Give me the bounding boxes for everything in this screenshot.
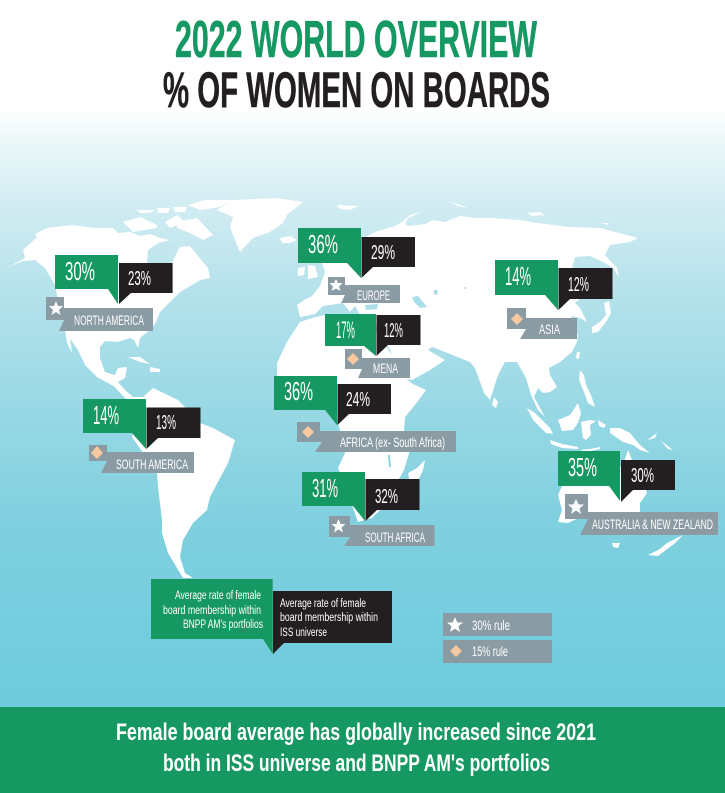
callout: North America: 23% xyxy=(128,268,151,290)
callout: MENA: MENA xyxy=(373,361,398,376)
callout: North America xyxy=(46,255,173,331)
callout: South Africa: 31% xyxy=(312,473,338,503)
callout: Australia and New Zealand: 30% xyxy=(631,465,654,487)
callout: Africa ex South Africa xyxy=(274,376,456,452)
callout: North America: 30% xyxy=(65,256,95,286)
callout: South America: 14% xyxy=(93,400,119,430)
callout: MENA: 17% xyxy=(336,317,355,344)
callout: Australia and New Zealand: 35% xyxy=(568,452,597,482)
key bubble: ISS universe: board membership within xyxy=(280,612,378,624)
key bubble: BNPP AM portfolios: board membership within xyxy=(163,605,261,617)
callout: Europe xyxy=(298,228,415,303)
callout: South Africa: SOUTH AFRICA xyxy=(365,530,425,545)
legend: 15% rule: 15% rule xyxy=(472,644,508,659)
callout: Asia: ASIA xyxy=(539,322,560,337)
callout: North America: NORTH AMERICA xyxy=(74,313,144,328)
key bubble: ISS universe: ISS universe xyxy=(280,627,327,639)
callout: Africa ex South Africa: 36% xyxy=(284,376,313,406)
world map xyxy=(0,198,683,578)
callout: South Africa: 32% xyxy=(375,486,398,508)
callout: Europe: 29% xyxy=(371,242,395,264)
legend: 15% rule xyxy=(443,640,552,663)
callout: Australia and New Zealand xyxy=(558,451,718,535)
key bubble: BNPP AM portfolios: Average rate of female xyxy=(175,590,261,602)
legend: 30% rule xyxy=(443,613,552,636)
callout: Asia xyxy=(495,260,612,339)
callout: Africa ex South Africa: 24% xyxy=(346,389,370,411)
callout: MENA xyxy=(325,314,420,378)
key bubble: BNPP AM portfolios xyxy=(151,579,273,654)
callout: South Africa xyxy=(302,472,434,546)
callout: South America: SOUTH AMERICA xyxy=(116,457,188,472)
key bubble: ISS universe xyxy=(273,591,392,654)
callout: Asia: 12% xyxy=(568,274,589,296)
key bubble: ISS universe: Average rate of female xyxy=(280,598,366,610)
footer banner: both in ISS universe and BNPP AM's portfolios xyxy=(163,750,550,777)
footer banner xyxy=(0,707,725,793)
key bubble: BNPP AM portfolios: BNPP AM's portfolios xyxy=(183,619,263,631)
callout: South America: 13% xyxy=(156,412,176,434)
callout: Asia: 14% xyxy=(505,261,531,291)
callout: South America xyxy=(83,399,200,473)
callout: MENA: 12% xyxy=(384,320,403,342)
inland seas xyxy=(365,287,466,467)
callout: Africa ex South Africa: AFRICA (ex- South Africa) xyxy=(340,435,445,450)
callout: Europe: 36% xyxy=(308,229,338,259)
callout: Europe: EUROPE xyxy=(357,288,390,303)
legend: 30% rule: 30% rule xyxy=(472,618,510,633)
